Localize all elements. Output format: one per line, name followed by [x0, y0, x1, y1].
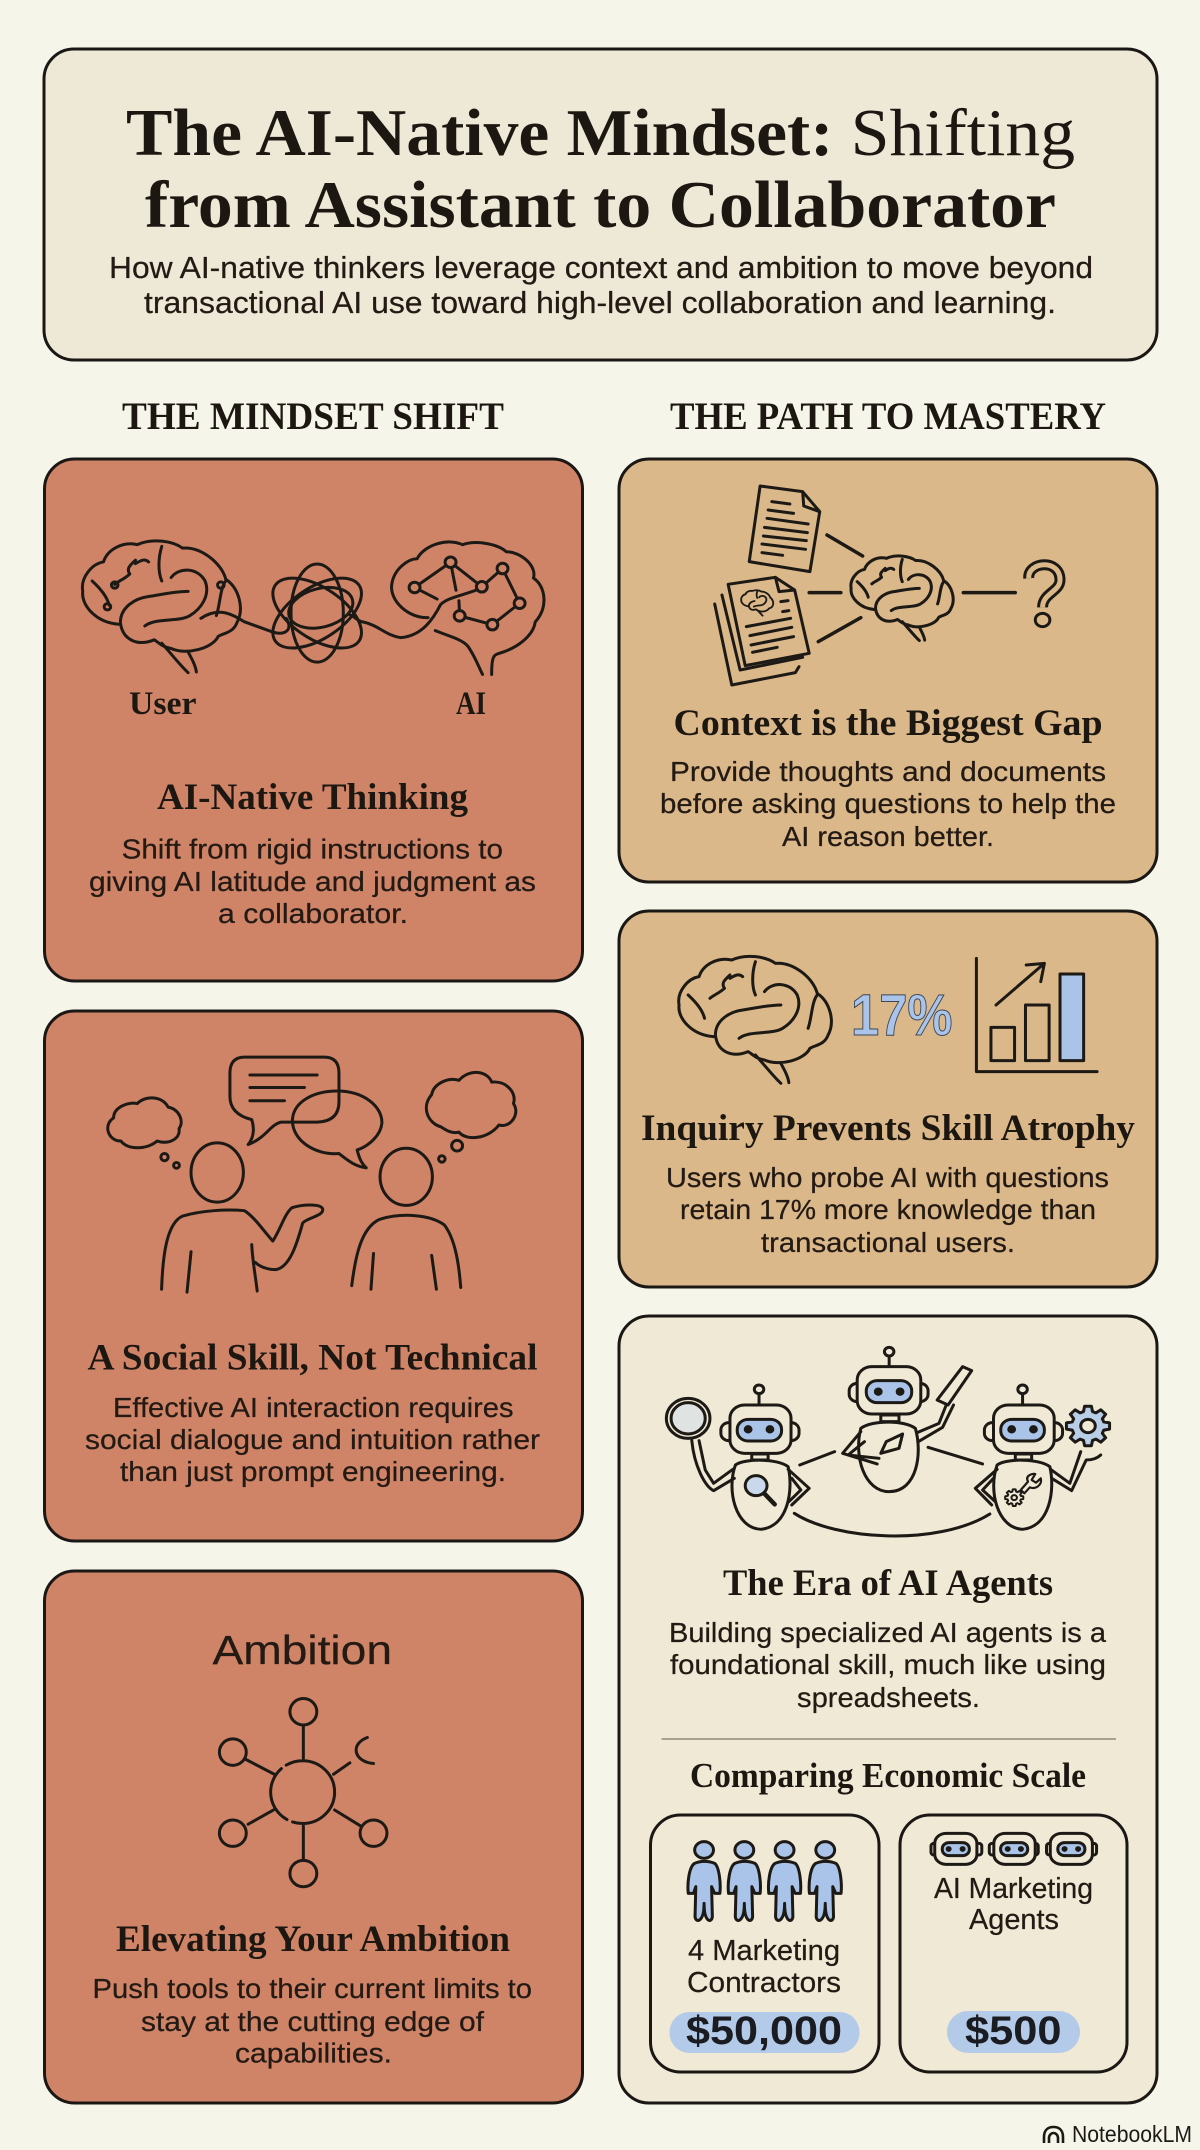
card body — [85, 1392, 540, 1487]
icon: four people — [688, 1842, 841, 1920]
card body: Shift from rigid instructions to — [122, 834, 503, 864]
card body: capabilities. — [235, 2038, 392, 2068]
card body: AI reason better. — [782, 821, 994, 852]
icon: two people in conversation — [108, 1057, 516, 1292]
card body: Users who probe AI with questions — [666, 1162, 1109, 1193]
subtitle: transactional AI use toward high-level collaboration and learning. — [144, 285, 1056, 320]
label: AI marketing agents: Agents — [969, 1904, 1059, 1936]
icon: ambition hub and nodes — [219, 1699, 387, 1887]
panel: elevating your ambition — [44, 1571, 582, 2103]
label: AI marketing agents: AI Marketing — [934, 1873, 1093, 1905]
comparison box: marketing contractors — [650, 1815, 879, 2072]
icon: three robot heads — [931, 1833, 1097, 1864]
value: $50,000: $50,000 — [686, 2009, 842, 2053]
heading: the path to mastery: THE PATH TO MASTERY — [670, 395, 1106, 438]
card body: giving AI latitude and judgment as — [89, 866, 536, 897]
title — [126, 96, 1075, 242]
title: from Assistant to Collaborator — [145, 168, 1056, 242]
card body: spreadsheets. — [797, 1682, 980, 1713]
robot: researcher — [666, 1385, 809, 1529]
card body: Effective AI interaction requires — [113, 1392, 514, 1423]
card body: social dialogue and intuition rather — [85, 1424, 540, 1455]
subtitle — [109, 250, 1093, 320]
card body — [666, 1162, 1109, 1258]
comparison box: AI marketing agents — [900, 1815, 1127, 2072]
icon: documents, brain and question mark — [715, 486, 1060, 685]
card heading: The Era of AI Agents — [723, 1563, 1053, 1604]
label: AI marketing agents — [934, 1873, 1093, 1936]
robot: writer — [843, 1347, 972, 1492]
panel: a social skill — [44, 1011, 582, 1541]
card body: stay at the cutting edge of — [141, 2006, 484, 2037]
card body: Provide thoughts and documents — [670, 756, 1106, 787]
card body: a collaborator. — [218, 898, 408, 929]
card body — [660, 756, 1116, 852]
robot: engineer — [975, 1385, 1110, 1529]
card body — [669, 1617, 1106, 1713]
icon: brain — [679, 956, 831, 1083]
subheading: comparing economic scale: Comparing Economic Scale — [690, 1756, 1086, 1795]
card heading: Elevating Your Ambition — [116, 1919, 510, 1960]
subtitle: How AI-native thinkers leverage context and ambition to move beyond — [109, 250, 1093, 285]
card body: Building specialized AI agents is a — [669, 1617, 1106, 1648]
label: 4 marketing contractors: 4 Marketing — [688, 1935, 840, 1967]
value: $500: $500 — [965, 2009, 1062, 2053]
label: 4 marketing contractors — [687, 1935, 841, 1999]
title: The AI-Native Mindset: Shifting — [126, 96, 1075, 170]
label: AI: AI — [456, 686, 486, 722]
panel: context is the biggest gap — [619, 459, 1157, 882]
card heading: Inquiry Prevents Skill Atrophy — [641, 1108, 1135, 1149]
heading: the mindset shift: THE MINDSET SHIFT — [122, 395, 504, 438]
brand: NotebookLM: NotebookLM — [1072, 2121, 1192, 2147]
card body: Push tools to their current limits to — [92, 1973, 532, 2004]
label: 4 marketing contractors: Contractors — [687, 1967, 841, 1999]
panel: AI-native thinking — [44, 459, 582, 981]
card body: transactional users. — [761, 1227, 1015, 1258]
icon: rising bar chart — [976, 958, 1097, 1072]
panel: inquiry prevents skill atrophy — [619, 911, 1157, 1287]
card heading: AI-Native Thinking — [157, 777, 468, 818]
card heading: Context is the Biggest Gap — [674, 703, 1102, 744]
panel: the era of AI agents — [619, 1316, 1157, 2103]
card body: than just prompt engineering. — [120, 1456, 506, 1487]
stat: 17%: 17% — [851, 983, 952, 1048]
card body: before asking questions to help the — [660, 788, 1116, 819]
icon: user brain, tangle and AI brain — [82, 541, 544, 674]
card body: retain 17% more knowledge than — [680, 1194, 1096, 1225]
header panel — [44, 49, 1157, 360]
card heading: A Social Skill, Not Technical — [88, 1338, 538, 1378]
label: user: User — [129, 686, 196, 722]
card body: foundational skill, much like using — [670, 1649, 1106, 1680]
icon: three collaborating robots — [666, 1347, 1110, 1536]
label: ambition: Ambition — [212, 1627, 392, 1673]
card body — [89, 834, 536, 929]
card body — [92, 1973, 532, 2068]
